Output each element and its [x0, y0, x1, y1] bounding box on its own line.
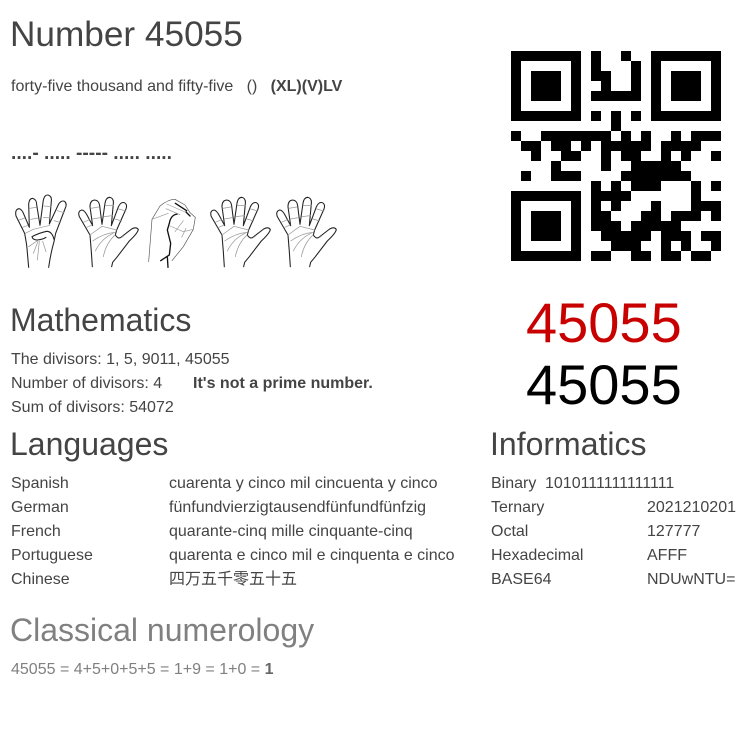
language table: 四万五千零五十五 [169, 571, 297, 588]
informatics table: 127777 [647, 523, 700, 540]
number of divisors: Number of divisors: 4 [11, 375, 162, 392]
language table: German [11, 499, 69, 516]
informatics table: 2021210201 [647, 499, 736, 516]
sign language hands [15, 194, 337, 268]
heading: languages: Languages [10, 426, 168, 462]
QR code [511, 51, 721, 261]
informatics table: Octal [491, 523, 528, 540]
sum of divisors: Sum of divisors: 54072 [11, 399, 174, 416]
language table: cuarenta y cinco mil cincuenta y cinco [169, 475, 438, 492]
language table: fünfundvierzigtausendfünfundfünfzig [169, 499, 426, 516]
hand: digit 4 [16, 195, 66, 267]
number in words and roman numeral: forty-five thousand and fifty-five () (XL)(V)LV [11, 78, 342, 95]
informatics table: NDUwNTU= [647, 571, 735, 588]
language table: quarante-cinq mille cinquante-cinq [169, 523, 413, 540]
hand: digit 0 [149, 199, 195, 267]
heading: classical numerology: Classical numerology [10, 612, 314, 648]
title: Number 45055 [10, 15, 243, 54]
section: languages [10, 426, 455, 588]
informatics table: Ternary [491, 499, 544, 516]
informatics table: AFFF [647, 547, 687, 564]
language table: Portuguese [11, 547, 93, 564]
large number in red: 45055 [526, 291, 682, 354]
heading: informatics: Informatics [490, 426, 646, 462]
hand: digit 5 [277, 197, 336, 267]
language table: Chinese [11, 571, 70, 588]
section: informatics [490, 426, 736, 588]
informatics table: BASE64 [491, 571, 551, 588]
hand: digit 5 [211, 197, 270, 267]
section: classical numerology [10, 612, 314, 678]
large number in black: 45055 [526, 353, 682, 416]
morse code: ....- ..... ----- ..... ..... [11, 143, 172, 164]
informatics table: Binary [491, 475, 536, 492]
numerology sum: 45055 = 4+5+0+5+5 = 1+9 = 1+0 = 1 [11, 661, 273, 678]
language table: quarenta e cinco mil e cinquenta e cinco [169, 547, 455, 564]
hand: digit 5 [79, 197, 138, 267]
language table: Spanish [11, 475, 69, 492]
language table [11, 475, 455, 588]
section: mathematics [10, 302, 373, 416]
prime note: It's not a prime number. [193, 375, 373, 392]
language table: French [11, 523, 61, 540]
informatics table: Hexadecimal [491, 547, 583, 564]
informatics table [491, 475, 736, 588]
informatics table: 1010111111111111 [545, 475, 674, 492]
divisors: The divisors: 1, 5, 9011, 45055 [11, 351, 230, 368]
heading: mathematics: Mathematics [10, 302, 191, 338]
